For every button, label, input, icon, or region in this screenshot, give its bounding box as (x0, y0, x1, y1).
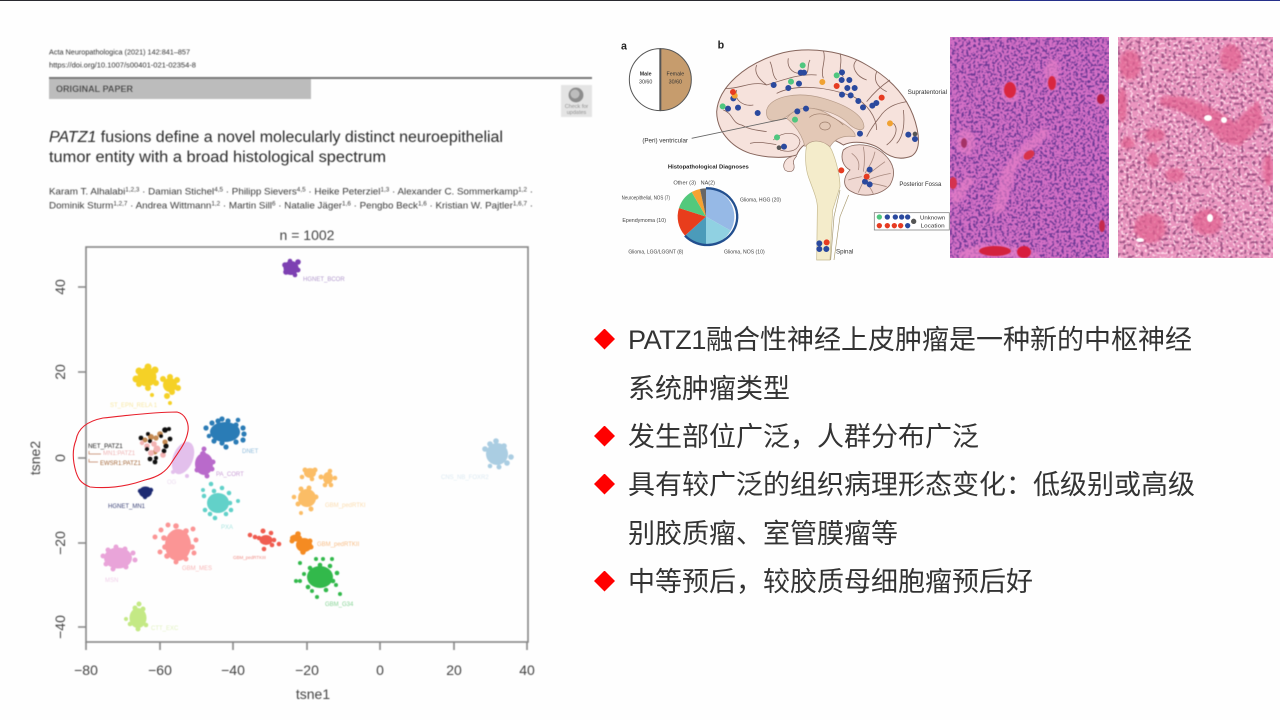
bullet text: new tumour type (628, 325, 1192, 404)
authors: 1,2 (211, 202, 221, 208)
cluster: PXA: PXA (221, 525, 233, 531)
authors: · Philipp Sievers (223, 186, 297, 196)
ventricular pointer (692, 118, 787, 138)
authors: 1,2,3 (125, 188, 140, 194)
axis labels and title: 20 (446, 662, 462, 678)
panel labels a and b (621, 40, 725, 52)
authors: 1,6 (342, 202, 352, 208)
image: histology right (1117, 37, 1273, 258)
authors: 1,2 (518, 188, 528, 194)
authors: · (527, 200, 533, 210)
axis labels and title: 0 (52, 454, 68, 462)
thalamus and midbrain (787, 108, 855, 147)
panel: patient figure (621, 40, 949, 260)
cluster: PA_CORT: PA_CORT (216, 472, 244, 478)
axis labels and title: −60 (148, 662, 172, 678)
cerebrum (717, 50, 919, 158)
axis labels and title: 40 (519, 662, 535, 678)
brain region labels: (Peri) ventricular (642, 138, 688, 144)
cluster: GBM_pedRTKI (292, 468, 366, 515)
panel labels a and b: b (718, 40, 725, 52)
chart: sex pie: Female (666, 72, 684, 78)
cluster: GBM_MES: GBM_MES (182, 566, 212, 572)
cluster: GBM_pedRTKIII (233, 528, 281, 560)
cluster: PXA (201, 482, 240, 531)
illustration: brain sagittal (692, 50, 919, 260)
tumor location dots (725, 70, 918, 252)
cluster: PA_CORT (194, 446, 244, 478)
axis labels and title: 0 (376, 662, 384, 678)
chart: sex pie: Male (640, 72, 652, 78)
cluster: ST_EPN_RELA (110, 364, 181, 409)
axis labels and title: −40 (52, 615, 68, 639)
cluster: GBM_pedRTKII (290, 531, 360, 555)
cluster: DNET (203, 416, 259, 455)
temporal lobe and pituitary (773, 133, 800, 172)
authors: 4,5 (297, 188, 306, 194)
brain region labels: Spinal (836, 249, 853, 255)
cluster: HGNET_MN1 (108, 486, 153, 510)
chart: tSNE scatter plot (27, 227, 535, 702)
chart: histopathological diagnoses pie: Glioma, LGG/LGGNT (8) (628, 249, 684, 255)
chart: histopathological diagnoses pie: Glioma, NOS (10) (724, 249, 765, 255)
bullet text: histology (628, 470, 1195, 548)
chart: histopathological diagnoses pie: Ependymoma (10) (622, 218, 666, 224)
authors: 6 (272, 202, 276, 208)
authors: · Damian Stichel (139, 186, 214, 196)
cluster: NET_PATZ1: EWSR1:PATZ1 (100, 461, 141, 467)
authors: · Natalie Jäger (276, 200, 342, 210)
cluster: GBM_G34 (294, 557, 354, 608)
icon: check for updates: updates (567, 110, 587, 116)
bullet text: prognosis: 中等预后，较胶质母细胞瘤预后好 (628, 567, 1033, 597)
cluster: NET_PATZ1 (88, 427, 172, 467)
cluster: CTT_EXC (124, 602, 179, 632)
chart: histopathological diagnoses pie: NA(2) (701, 181, 715, 187)
authors: · (527, 186, 533, 196)
bullet icon (594, 426, 615, 446)
axis labels and title: n = 1002 (280, 227, 335, 243)
cluster: HGNET_BCOR: HGNET_BCOR (303, 277, 345, 283)
callout: red hand-drawn circle (73, 412, 188, 488)
icon: check for updates: Check for (565, 104, 588, 110)
axis labels and title: 20 (52, 364, 68, 380)
legend: dot colours (874, 213, 949, 230)
axis labels and title (27, 227, 535, 702)
chart: histopathological diagnoses pie: Glioma, HGG (20) (740, 198, 781, 204)
cluster: ST_EPN_RELA: ST_EPN_RELA 1 (110, 403, 158, 409)
axis labels and title: tsne2 (27, 441, 43, 475)
cluster: GBM_MES (152, 522, 212, 572)
authors: Karam T. Alhalabi (49, 186, 121, 196)
bullet text: new tumour type: 系统肿瘤类型 (628, 374, 790, 404)
cluster: CNS_NB_FOXR2 (441, 438, 514, 481)
authors: · Martin Sill (220, 200, 272, 210)
journal citation: https://doi.org/10.1007/s00401-021-02354-8 (49, 60, 196, 70)
chart: sex pie (629, 49, 691, 111)
bullet icon (594, 570, 615, 592)
original paper band (49, 77, 592, 99)
chart: histopathological diagnoses pie (622, 164, 781, 255)
bullet text: histology: 别胶质瘤、室管膜瘤等 (628, 518, 898, 548)
cluster: HGNET_BCOR (282, 259, 345, 283)
axis labels and title: −80 (74, 662, 98, 678)
spinal cord and brainstem (806, 141, 849, 260)
cluster: MSN: MSN (105, 578, 118, 584)
cluster: OG: OG (167, 480, 177, 486)
authors: · Heike Peterziel (306, 186, 380, 196)
cluster: HGNET_MN1: HGNET_MN1 (108, 504, 146, 510)
cluster: OG (167, 438, 199, 486)
cluster: GBM_pedRTKI: GBM_pedRTKI (325, 503, 366, 509)
axis labels and title: tsne1 (296, 686, 330, 702)
axis labels and title: −20 (52, 531, 68, 555)
brain region labels (642, 90, 947, 255)
top edge bar (0, 0, 1280, 1)
authors: 1,3 (380, 188, 390, 194)
legend: dot colours: Unknown (920, 216, 945, 222)
corpus callosum (766, 95, 864, 130)
authors: · Kristian W. Pajtler (427, 200, 513, 210)
bullet icon (594, 474, 615, 494)
legend: dot colours: Location (921, 224, 945, 230)
cerebellum (842, 145, 894, 195)
paper title (49, 129, 503, 166)
axis labels and title: −20 (295, 662, 319, 678)
cluster: GBM_pedRTKIII: GBM_pedRTKIII (233, 555, 266, 560)
authors: 4,5 (214, 188, 224, 194)
cluster: MSN (100, 544, 138, 584)
brain region labels: Posterior Fossa (899, 182, 942, 188)
axis labels and title: −40 (221, 662, 245, 678)
paper title: PATZ1 fusions define a novel molecularly distinct neuroepithelial (49, 129, 503, 146)
bullet icon (594, 328, 615, 350)
journal citation: Acta Neuropathologica (2021) 142:841–857 (49, 48, 190, 56)
authors (49, 186, 533, 210)
authors: 1,6 (418, 202, 427, 208)
cluster: DNET: DNET (242, 449, 259, 455)
chart: histopathological diagnoses pie: Other (3) (673, 181, 696, 187)
brain region labels: Supratentorial (908, 90, 947, 96)
cluster: NET_PATZ1: NET_PATZ1 (88, 443, 123, 450)
authors: · Andrea Wittmann (127, 200, 211, 210)
bullet text: histology: 具有较广泛的组织病理形态变化：低级别或高级 (628, 470, 1195, 500)
gyri folds (723, 51, 907, 145)
authors: 1,6,7 (513, 202, 528, 208)
axis labels and title: 40 (52, 279, 68, 295)
authors: · Alexander C. Sommerkamp (389, 186, 518, 196)
panel: paper header (49, 48, 592, 210)
authors: 1,2,7 (113, 202, 128, 208)
cluster: GBM_pedRTKII: GBM_pedRTKII (317, 542, 360, 548)
cluster: CTT_EXC: CTT_EXC (151, 626, 179, 632)
authors: · Pengbo Beck (351, 200, 418, 210)
icon: check for updates (561, 85, 592, 117)
chart: sex pie: 30/60 (639, 80, 652, 86)
cluster: CNS_NB_FOXR2: CNS_NB_FOXR2 (441, 475, 489, 481)
panel: key points (594, 325, 1195, 597)
bullet text: new tumour type: PATZ1融合性神经上皮肿瘤是一种新的中枢神经 (628, 325, 1192, 355)
original paper band: ORIGINAL PAPER (56, 84, 134, 94)
cluster: GBM_G34: GBM_G34 (325, 602, 354, 608)
image: histology left (949, 37, 1109, 258)
authors: Dominik Sturm (49, 200, 110, 210)
paper title: tumor entity with a broad histological spectrum (49, 149, 386, 166)
panel labels a and b: a (621, 40, 627, 52)
chart: sex pie: 30/60 (669, 80, 682, 86)
plot frame and axes (78, 247, 528, 650)
journal citation (49, 48, 196, 70)
cluster: NET_PATZ1: MN1:PATZ1 (103, 451, 136, 457)
bullet text: location and population: 发生部位广泛，人群分布广泛 (628, 422, 979, 452)
chart: histopathological diagnoses pie: Neuroepithelial, NOS (7) (622, 195, 670, 201)
chart: histopathological diagnoses pie: Histopathological Diagnoses (668, 164, 749, 170)
